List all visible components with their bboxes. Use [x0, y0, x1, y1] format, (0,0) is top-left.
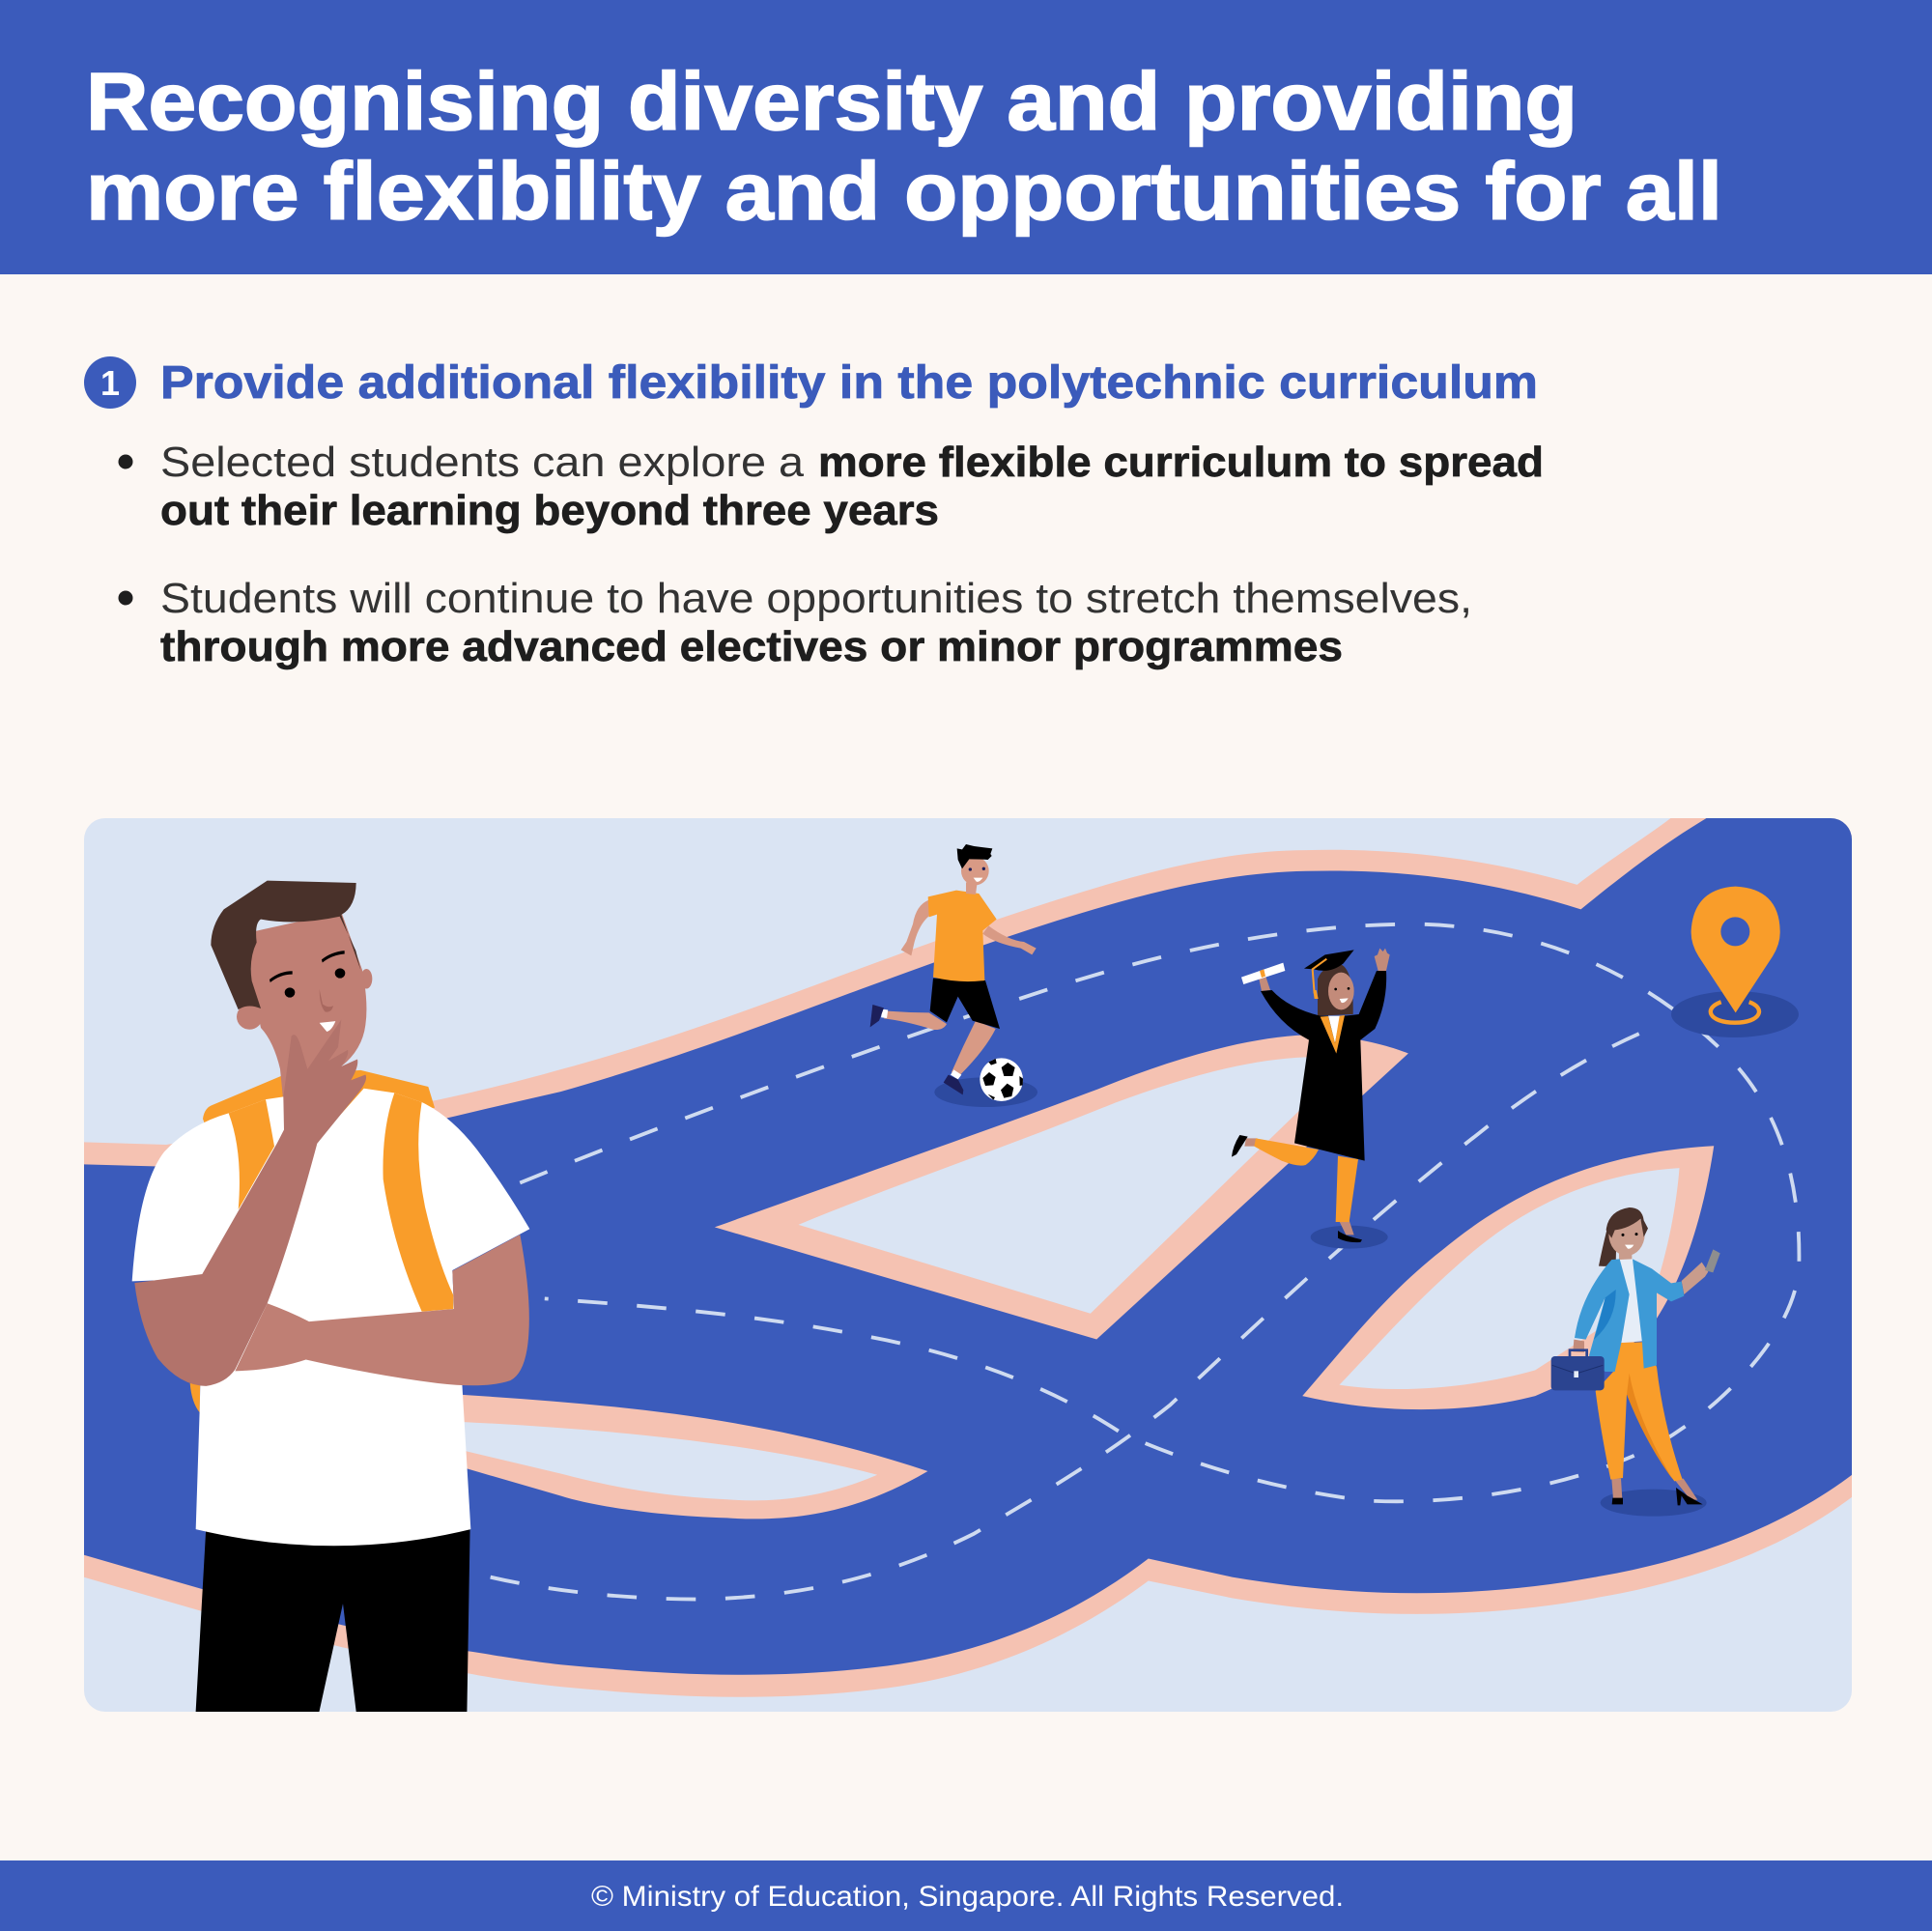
- figure: working woman: [1551, 1207, 1720, 1517]
- bullet point 2: through more advanced electives or minor programmes: [160, 623, 1343, 670]
- figure: graduate: [1232, 949, 1390, 1249]
- winding road: [84, 818, 1852, 1697]
- number badge: 1: [100, 363, 120, 403]
- icon: football: [980, 1058, 1023, 1101]
- section heading: Provide additional flexibility in the polytechnic curriculum: [160, 357, 1538, 409]
- number badge: [84, 356, 136, 409]
- bullet point 1: [118, 439, 1544, 534]
- bullet point 1: out their learning beyond three years: [160, 487, 939, 534]
- bullet point 2: Students will continue to have opportunities to stretch themselves,: [160, 575, 1472, 622]
- title: more flexibility and opportunities for all: [86, 146, 1722, 237]
- icon: location pin: [1671, 887, 1799, 1037]
- panel: road illustration: [84, 818, 1852, 1717]
- title: Recognising diversity and providing: [86, 56, 1577, 147]
- bullet point 1: more flexible curriculum to spread: [818, 439, 1544, 486]
- title: [86, 56, 1722, 237]
- figure: thinking student: [132, 881, 529, 1717]
- bullet point 2: [118, 575, 1472, 670]
- student face details: [270, 952, 345, 1032]
- header banner: [0, 0, 1932, 274]
- bullet point 1: Selected students can explore a: [160, 439, 805, 486]
- icon: briefcase: [1551, 1350, 1605, 1390]
- figure: footballer: [870, 844, 1037, 1107]
- footer banner: [0, 1860, 1932, 1931]
- copyright text: © Ministry of Education, Singapore. All Rights Reserved.: [591, 1881, 1344, 1913]
